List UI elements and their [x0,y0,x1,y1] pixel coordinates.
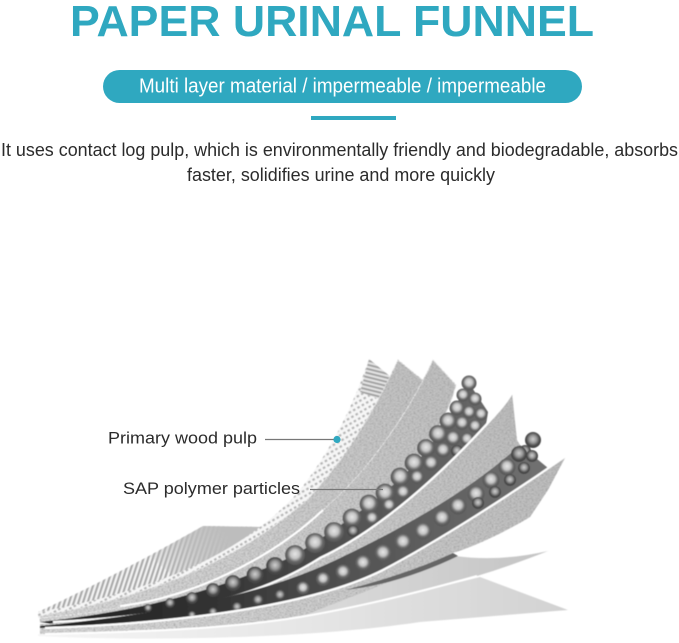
textured layer three [40,360,456,622]
white edge of layer five [45,456,566,628]
leader line [310,488,383,490]
back sheet grey corner [150,526,262,590]
label: primary wood pulp [108,430,341,448]
back striped sheet [38,526,262,612]
description text [1,140,678,185]
layered material illustration [38,359,568,639]
bottom sheet [38,577,568,639]
label: SAP polymer particles: SAP polymer particles [123,480,300,498]
upper particle row [144,376,488,612]
pill banner [103,70,582,103]
leader line [265,438,334,440]
description text: faster, solidifies urine and more quickly [187,165,495,185]
white separator [120,510,323,606]
textured layer two [40,360,425,618]
backing of lower particle row [40,445,548,631]
white edge of layer four [53,393,512,622]
pill banner: Multi layer material / impermeable / impermeable [139,76,546,98]
teal marker dot [333,436,341,443]
thin under sheet [40,551,548,634]
textured layer four [40,393,520,628]
lower particle row [188,432,541,619]
label: primary wood pulp: Primary wood pulp [108,430,257,448]
accent bar [311,116,396,120]
white edge of bottom sheet [45,576,477,634]
description text: It uses contact log pulp, which is environmentally friendly and biodegradable, absorbs [1,140,678,160]
striped tip of pulp layer [360,359,392,400]
textured layer five [40,456,566,634]
dotted pulp layer [38,359,392,618]
shadow below layer five [345,553,458,590]
backing of upper particle row [40,383,488,624]
